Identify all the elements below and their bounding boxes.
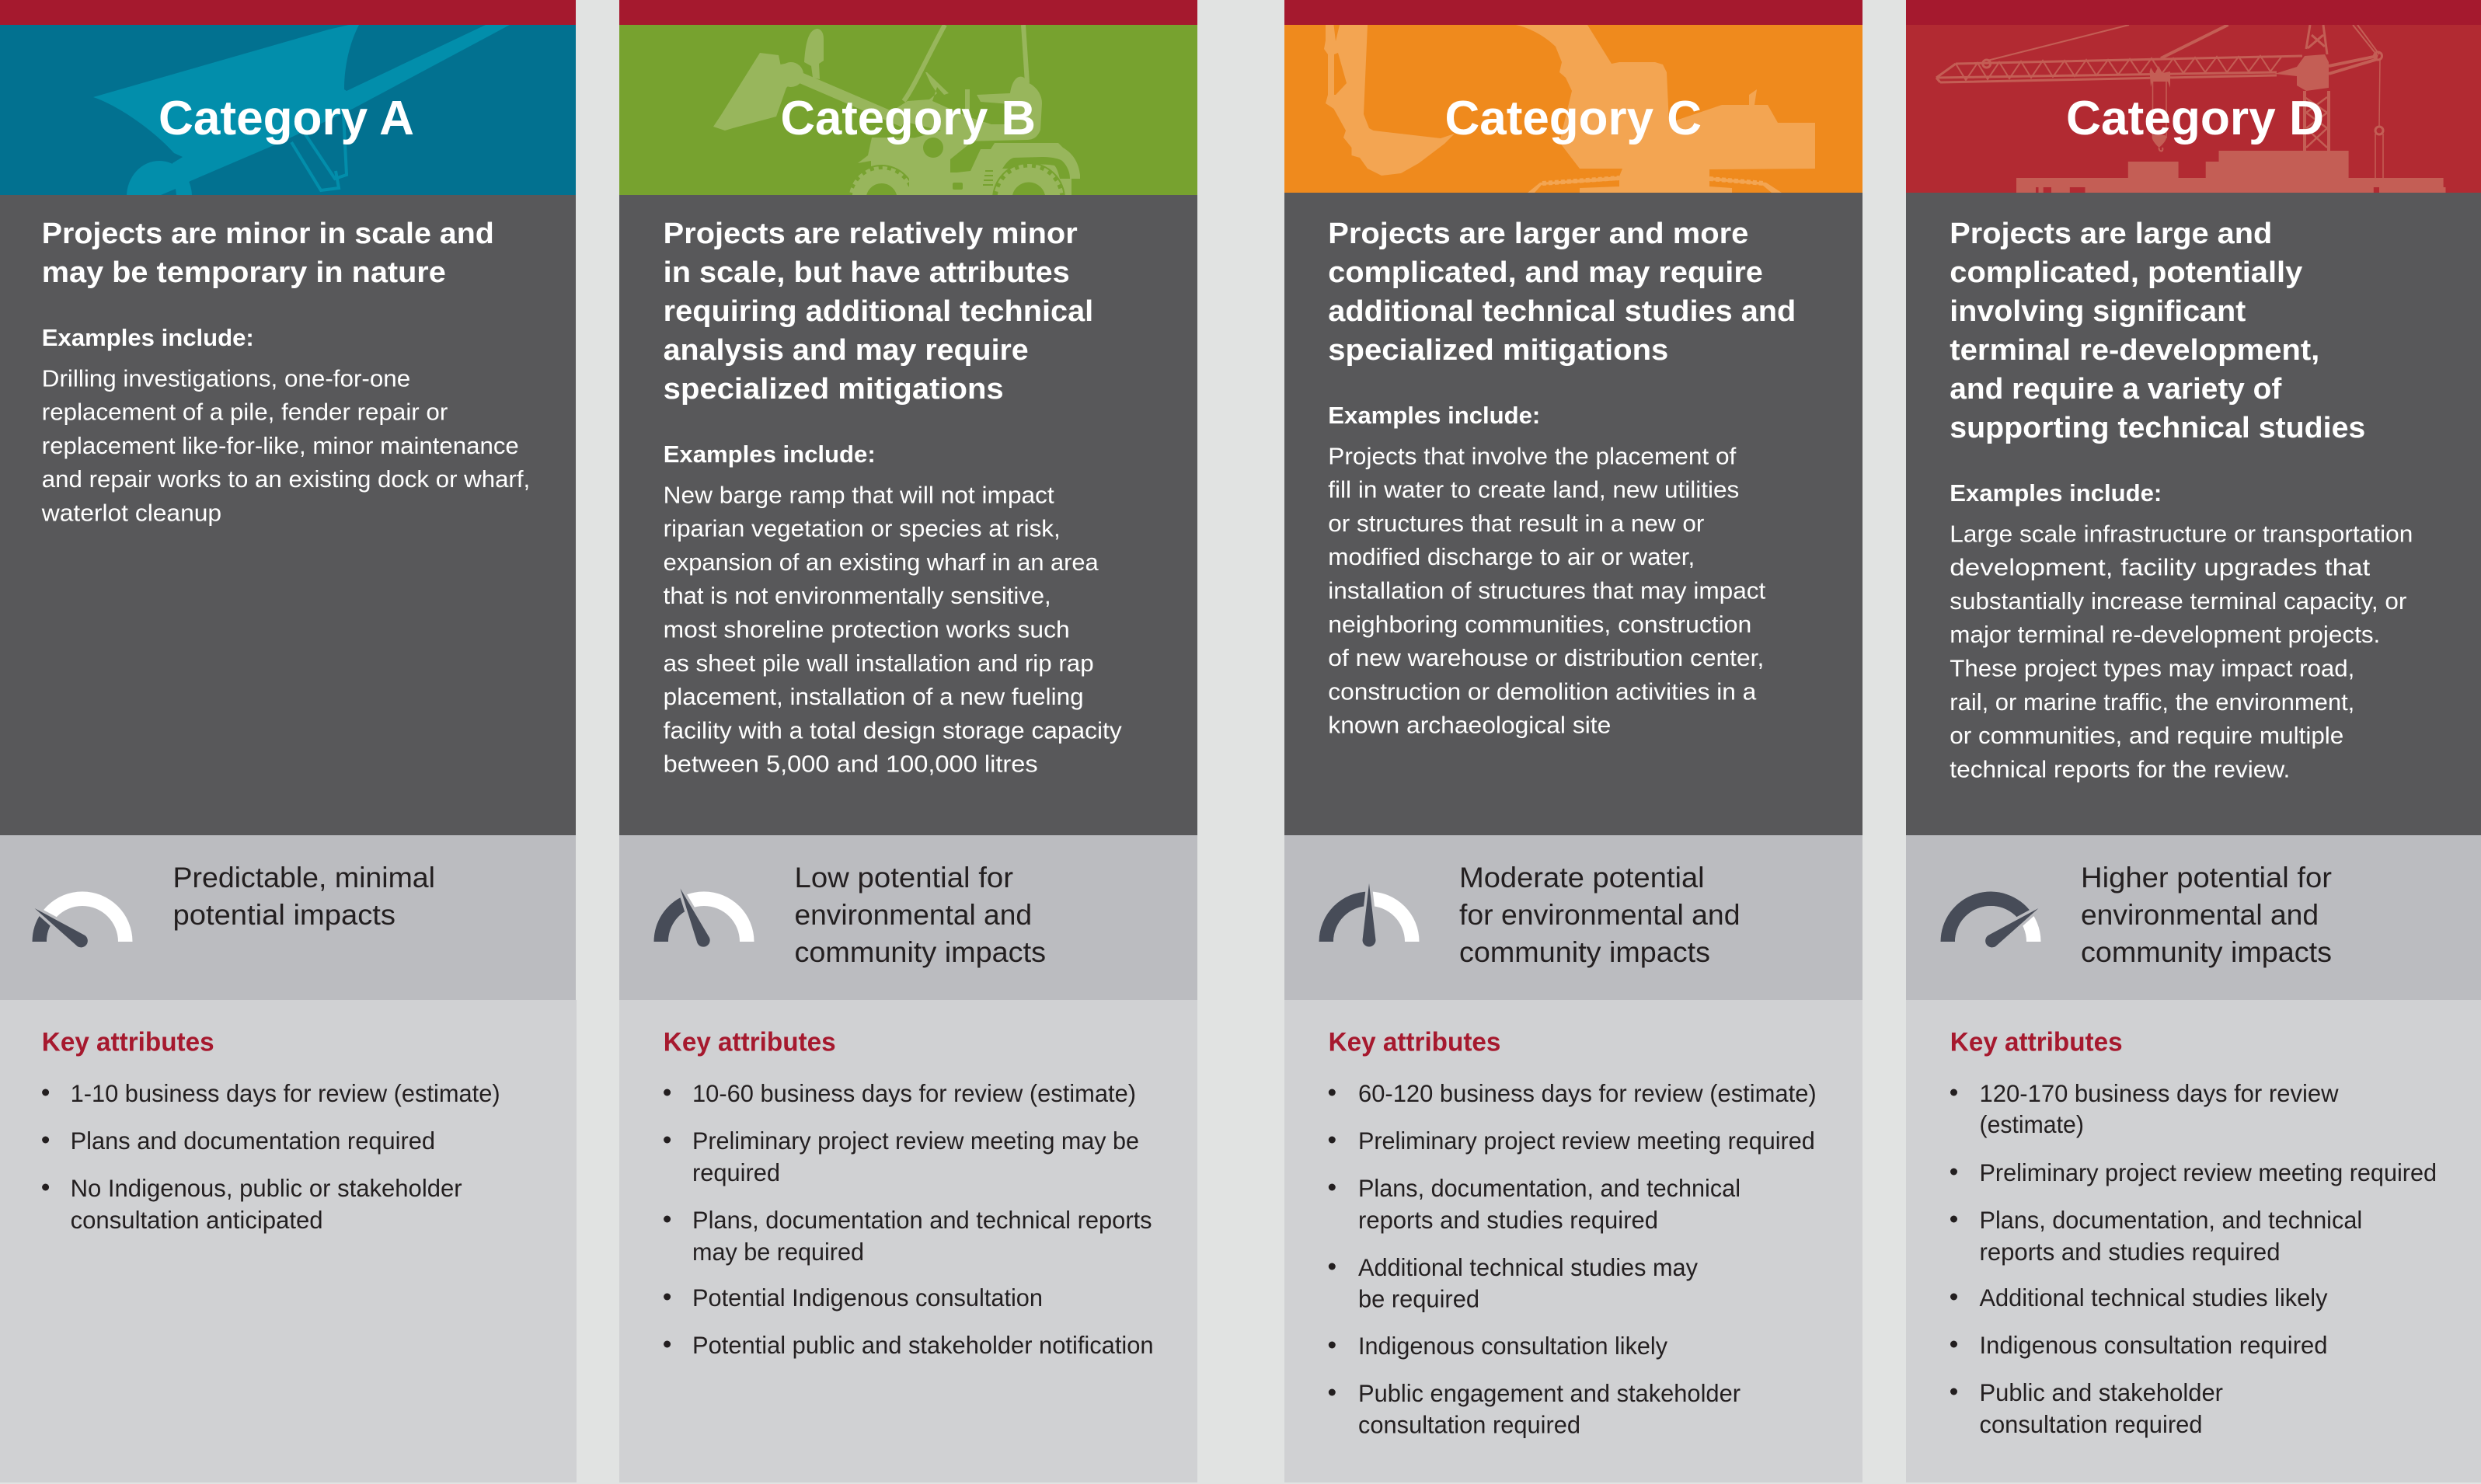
heading: Projects are minor in scale and	[42, 218, 494, 250]
impact band	[619, 835, 1197, 1000]
panel: Category B	[619, 0, 1197, 1482]
icon: gauge high	[1941, 892, 2042, 950]
examples text: construction or demolition activities in a	[1328, 678, 1756, 705]
heading	[1950, 218, 2365, 444]
key attributes list	[1329, 1079, 1817, 1439]
heading: requiring additional technical	[664, 295, 1093, 328]
examples text: and repair works to an existing dock or wharf,	[42, 466, 530, 493]
heading: Projects are larger and more	[1328, 218, 1748, 250]
examples text: technical reports for the review.	[1950, 756, 2290, 782]
icon: loader tractor	[713, 25, 1080, 195]
header: Category A	[0, 25, 576, 195]
heading	[664, 218, 1093, 406]
key attributes list: reports and studies required	[1980, 1238, 2280, 1266]
heading	[1328, 218, 1796, 367]
icon: gauge low	[31, 892, 132, 950]
impact text: Higher potential for	[2081, 862, 2332, 894]
key attributes list	[664, 1079, 1154, 1359]
heading: Projects are relatively minor	[664, 218, 1078, 250]
key attributes list: required	[692, 1158, 780, 1186]
key attributes list: Plans, documentation and technical reports	[692, 1206, 1152, 1234]
key attributes list: Additional technical studies likely	[1980, 1284, 2328, 1312]
examples text: Large scale infrastructure or transportation	[1950, 521, 2413, 547]
examples text: neighboring communities, construction	[1328, 611, 1751, 638]
examples text: riparian vegetation or species at risk,	[664, 516, 1061, 542]
description block	[1284, 193, 1862, 835]
key attributes list: Public engagement and stakeholder	[1358, 1379, 1741, 1407]
examples label: Examples include:	[1328, 402, 1540, 429]
examples text: Projects that involve the placement of	[1328, 443, 1737, 469]
title: Category A	[159, 92, 414, 145]
key attributes list: Preliminary project review meeting may be	[692, 1127, 1139, 1155]
description block	[1906, 193, 2481, 835]
examples text	[664, 482, 1122, 778]
examples text: of new warehouse or distribution center,	[1328, 645, 1764, 671]
key attributes list: No Indigenous, public or stakeholder	[71, 1174, 462, 1202]
key attributes list: consultation required	[1980, 1410, 2202, 1438]
impact text	[172, 862, 435, 931]
examples text: known archaeological site	[1328, 712, 1611, 739]
description block	[0, 195, 576, 835]
heading: involving significant	[1950, 295, 2246, 328]
examples text: waterlot cleanup	[41, 500, 221, 527]
key attributes list: Plans, documentation, and technical	[1358, 1174, 1741, 1202]
key attributes list: 1-10 business days for review (estimate)	[71, 1079, 500, 1107]
examples text: or communities, and require multiple	[1950, 723, 2343, 749]
examples text: between 5,000 and 100,000 litres	[664, 751, 1038, 778]
header: Category B	[619, 25, 1197, 195]
key attributes list: Plans and documentation required	[71, 1127, 435, 1155]
heading: analysis and may require	[664, 334, 1029, 367]
impact text: environmental and	[2081, 899, 2319, 931]
impact text: community impacts	[2081, 936, 2332, 968]
examples label: Examples include:	[664, 441, 876, 468]
key attributes list: consultation required	[1358, 1411, 1580, 1439]
impact text: community impacts	[794, 936, 1046, 968]
examples text: most shoreline protection works such	[664, 617, 1070, 643]
heading: specialized mitigations	[664, 373, 1004, 406]
examples text: as sheet pile wall installation and rip rap	[664, 650, 1094, 677]
key attributes list: Public and stakeholder	[1980, 1378, 2223, 1406]
heading: complicated, and may require	[1328, 256, 1763, 289]
examples text: rail, or marine traffic, the environment,	[1950, 689, 2354, 716]
key attributes list: Potential Indigenous consultation	[692, 1284, 1043, 1312]
key attributes heading: Key attributes	[42, 1028, 214, 1057]
icon: wheelbarrow	[93, 25, 510, 195]
key attributes list: 10-60 business days for review (estimate)	[692, 1079, 1136, 1107]
key attributes list	[42, 1079, 500, 1234]
examples text: substantially increase terminal capacity, or	[1950, 588, 2406, 615]
heading: in scale, but have attributes	[664, 256, 1070, 289]
examples text: modified discharge to air or water,	[1328, 544, 1695, 570]
heading: Projects are large and	[1950, 218, 2272, 250]
examples text: development, facility upgrades that	[1950, 555, 2371, 581]
examples text: major terminal re-development projects.	[1950, 622, 2380, 648]
panel: Category A	[0, 0, 577, 1482]
key attributes list: Plans, documentation, and technical	[1980, 1206, 2362, 1234]
key attributes list: 120-170 business days for review	[1980, 1079, 2339, 1107]
impact band	[0, 835, 576, 1000]
examples text: that is not environmentally sensitive,	[664, 583, 1051, 609]
impact text	[2081, 862, 2332, 968]
examples text	[1328, 443, 1766, 739]
icon: tower crane and building	[1936, 25, 2446, 193]
heading: complicated, potentially	[1950, 256, 2302, 289]
key attributes list: consultation anticipated	[71, 1206, 323, 1234]
key attributes list: may be required	[692, 1238, 864, 1266]
title: Category D	[2066, 92, 2324, 145]
examples text: placement, installation of a new fueling	[664, 684, 1084, 710]
heading: additional technical studies and	[1328, 295, 1796, 328]
impact text: Moderate potential	[1459, 862, 1705, 894]
title: Category C	[1445, 92, 1702, 145]
key attributes heading: Key attributes	[1950, 1028, 2123, 1057]
title: Category B	[780, 92, 1036, 145]
impact text: Low potential for	[794, 862, 1013, 894]
impact text: environmental and	[794, 899, 1032, 931]
heading: terminal re-development,	[1950, 334, 2319, 367]
key attributes list: reports and studies required	[1358, 1206, 1658, 1234]
examples text: replacement of a pile, fender repair or	[42, 399, 448, 426]
key attributes list: be required	[1358, 1285, 1479, 1313]
impact band	[1284, 835, 1862, 1000]
key attributes list: 60-120 business days for review (estimate)	[1358, 1079, 1817, 1107]
examples text: installation of structures that may impact	[1328, 578, 1766, 604]
heading: may be temporary in nature	[42, 256, 446, 289]
examples text: facility with a total design storage capacity	[664, 717, 1122, 744]
examples text: New barge ramp that will not impact	[664, 482, 1054, 508]
heading: and require a variety of	[1950, 373, 2282, 406]
key attributes list: Preliminary project review meeting required	[1980, 1158, 2437, 1186]
key attributes list	[1950, 1079, 2437, 1438]
panel: Category C	[1284, 0, 1862, 1482]
description block	[619, 195, 1197, 835]
examples text: or structures that result in a new or	[1328, 510, 1704, 537]
examples label: Examples include:	[42, 324, 254, 351]
impact text: community impacts	[1459, 936, 1710, 968]
examples text: replacement like-for-like, minor maintenance	[42, 433, 519, 459]
examples text	[1950, 521, 2413, 782]
examples text	[41, 365, 530, 527]
heading	[42, 218, 494, 289]
header: Category C	[1284, 25, 1862, 193]
impact text: potential impacts	[172, 899, 395, 931]
heading: specialized mitigations	[1328, 334, 1668, 367]
examples text: These project types may impact road,	[1950, 656, 2354, 682]
icon: gauge low-mid	[654, 886, 754, 949]
key attributes list: Indigenous consultation likely	[1358, 1332, 1667, 1360]
key attributes list: Indigenous consultation required	[1980, 1331, 2328, 1359]
examples label: Examples include:	[1950, 479, 2162, 507]
examples text: fill in water to create land, new utilities	[1328, 477, 1739, 503]
impact text: Predictable, minimal	[172, 862, 435, 894]
header: Category D	[1906, 25, 2481, 193]
examples text: Drilling investigations, one-for-one	[42, 365, 410, 392]
impact band	[1906, 835, 2481, 1000]
key attributes list: (estimate)	[1980, 1110, 2084, 1138]
impact text	[1459, 862, 1741, 968]
key attributes heading: Key attributes	[664, 1028, 836, 1057]
impact text: for environmental and	[1459, 899, 1741, 931]
key attributes list: Potential public and stakeholder notification	[692, 1331, 1154, 1359]
impact text	[794, 862, 1046, 968]
key attributes heading: Key attributes	[1329, 1028, 1500, 1057]
key attributes list: Additional technical studies may	[1358, 1253, 1698, 1281]
key attributes list: Preliminary project review meeting required	[1358, 1127, 1815, 1155]
examples text: expansion of an existing wharf in an area	[664, 549, 1099, 576]
icon: excavator	[1324, 25, 1815, 193]
icon: gauge moderate	[1319, 883, 1419, 946]
panel: Category D	[1906, 0, 2481, 1482]
heading: supporting technical studies	[1950, 412, 2365, 444]
